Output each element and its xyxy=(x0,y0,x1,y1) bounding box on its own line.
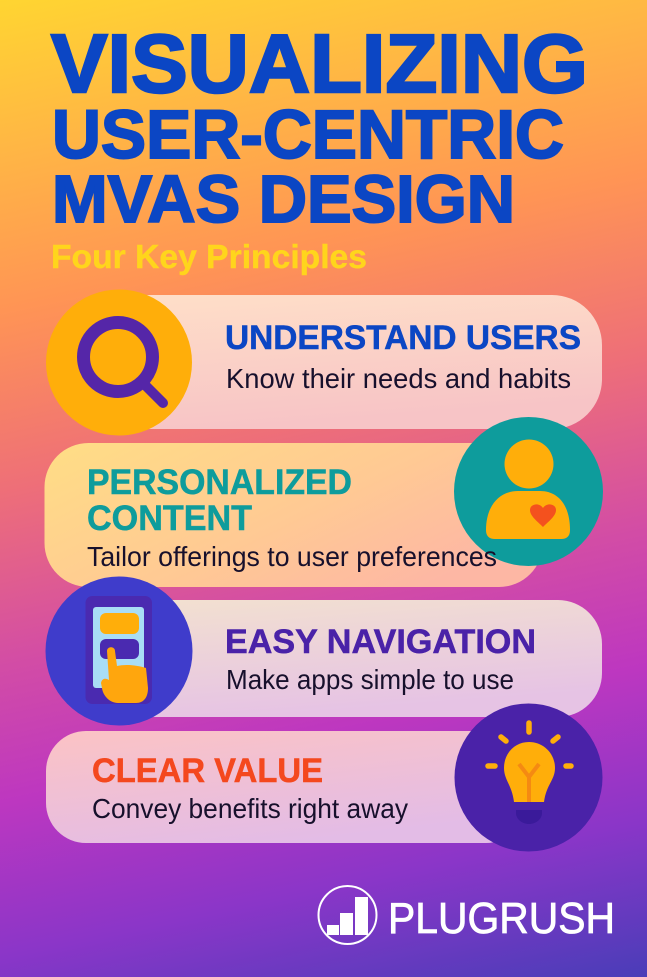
heading: CLEAR VALUE xyxy=(92,752,323,790)
panel: understand users xyxy=(46,290,602,436)
description: Make apps simple to use xyxy=(226,664,514,695)
description: Convey benefits right away xyxy=(92,793,408,824)
icon: magnifying glass xyxy=(46,290,192,436)
card background xyxy=(60,600,602,717)
heading line 2: CONTENT xyxy=(87,499,252,538)
title line: MVAS DESIGN: MVAS DESIGN xyxy=(52,162,515,237)
logo: PlugRush xyxy=(318,886,615,944)
subtitle: Four Key Principles xyxy=(51,238,367,275)
panel: easy navigation xyxy=(46,576,602,726)
heading: UNDERSTAND USERS xyxy=(225,319,581,357)
panel: clear value xyxy=(46,704,602,852)
card background xyxy=(44,443,543,587)
card background xyxy=(60,295,602,429)
heading: EASY NAVIGATION xyxy=(225,623,536,661)
icon: light bulb xyxy=(454,704,602,852)
heading line 1: PERSONALIZED xyxy=(87,463,352,502)
card background xyxy=(46,731,526,843)
logo mark xyxy=(318,886,376,944)
title xyxy=(51,17,588,237)
icon: phone with tapping hand xyxy=(46,576,192,726)
logo wordmark: PLUGRUSH xyxy=(388,894,615,943)
title line: VISUALIZING: VISUALIZING xyxy=(51,17,588,110)
icon: person with heart xyxy=(454,417,603,566)
title line: USER-CENTRIC: USER-CENTRIC xyxy=(52,96,564,173)
description: Tailor offerings to user preferences xyxy=(87,541,497,572)
panel: personalized content xyxy=(44,417,603,587)
description: Know their needs and habits xyxy=(226,363,571,394)
heading xyxy=(87,463,352,538)
